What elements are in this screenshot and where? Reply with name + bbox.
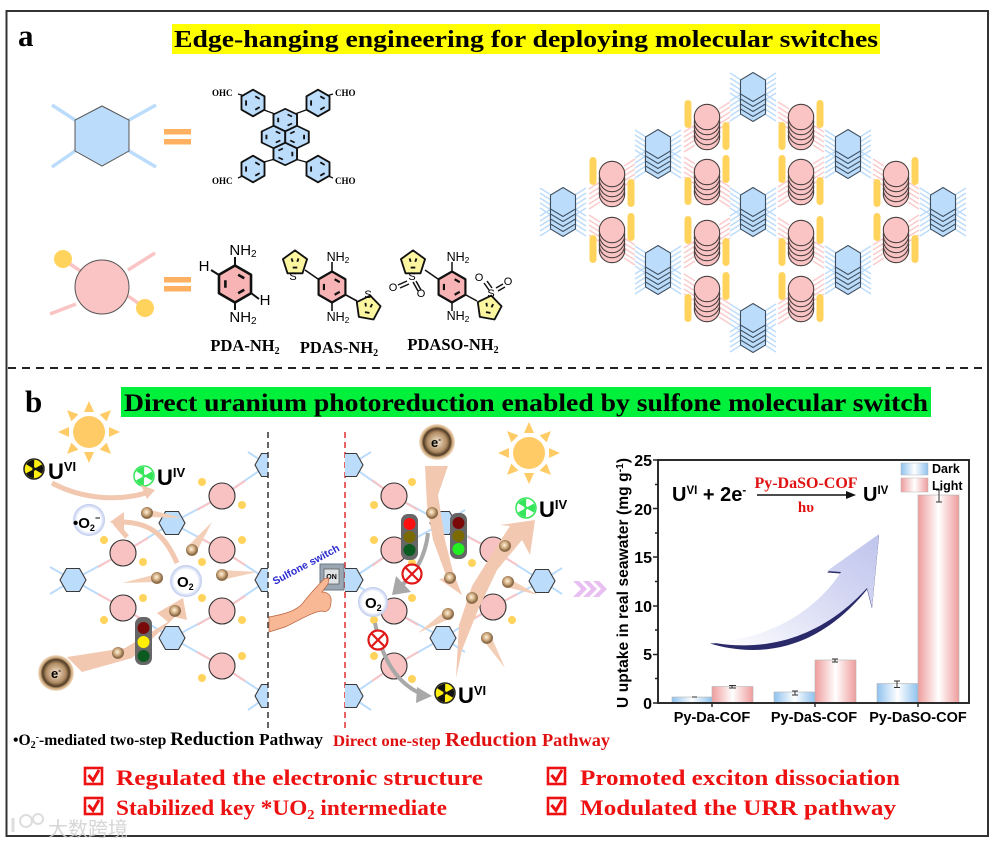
- icon: sun right: [498, 422, 560, 484]
- label PDAS-NH2: 2: [373, 348, 378, 359]
- y axis title: ): [615, 458, 632, 463]
- molecule: pyrene tetra-aldehyde: CHO: [335, 88, 356, 98]
- blocked marker 2: [368, 630, 388, 650]
- x labels: Py-Da-COF: [674, 710, 750, 726]
- equation: U: [863, 484, 877, 506]
- molecule: PDAS-NH2: 2: [345, 315, 350, 325]
- y axis labels: 10: [634, 599, 652, 616]
- molecule: pyrene tetra-aldehyde: OHC: [212, 176, 233, 186]
- molecule: pyrene tetra-aldehyde: CHO: [335, 176, 356, 186]
- divider red: [344, 432, 346, 730]
- COF network right: [337, 452, 562, 710]
- molecule: pyrene tetra-aldehyde: OHC: [212, 88, 233, 98]
- molecule: PDAS-NH2: S: [289, 271, 297, 283]
- bar chart: [615, 453, 969, 726]
- sulfone switch with hand: ON: [326, 574, 337, 581]
- O2 bubble: [170, 565, 202, 597]
- comet electrons: [122, 507, 257, 584]
- molecule: PDAS-NH2: NH: [327, 250, 345, 264]
- molecule: PDASO-NH2: S: [487, 288, 495, 300]
- electron flow arrow down: [419, 424, 462, 595]
- y axis labels: 15: [634, 550, 652, 567]
- U(IV) label right: IV: [555, 497, 568, 512]
- molecule: PDA-NH2: NH: [229, 242, 251, 259]
- y axis labels: 0: [643, 696, 652, 713]
- electron flow arrow down: -: [438, 435, 441, 444]
- molecule: PDASO-NH2: [389, 250, 513, 324]
- molecule: PDAS-NH2: S: [364, 289, 372, 301]
- item: UO2 intermediate: 2: [307, 808, 315, 823]
- molecule: PDA-NH2: [199, 242, 270, 327]
- equals sign 2: [164, 277, 191, 292]
- electron flow arrow: e: [51, 666, 58, 681]
- panel: b: [13, 384, 969, 842]
- legend: Dark: [932, 462, 960, 476]
- U(VI) label: U: [48, 459, 64, 484]
- label PDA-NH2: 2: [275, 346, 280, 357]
- equation: -: [742, 485, 746, 497]
- molecule: PDASO-NH2: O: [417, 288, 426, 300]
- label PDASO-NH2: PDASO-NH: [407, 335, 494, 354]
- big trend arrow: [710, 534, 879, 650]
- caption: two-step pathway: -mediated two-step: [39, 732, 170, 749]
- O2 bubble right: 2: [377, 603, 382, 613]
- molecule: PDASO-NH2: 2: [465, 255, 470, 265]
- x labels: [674, 710, 967, 726]
- watermark: [13, 813, 128, 842]
- heading b: Direct uranium photoreduction enabled by sulfone molecular switch: [124, 390, 928, 417]
- caption: two-step pathway: 2: [31, 740, 36, 751]
- icon: pink circle node: [50, 250, 155, 317]
- molecule: PDAS-NH2: 2: [345, 255, 350, 265]
- equation: [672, 475, 889, 516]
- molecule: PDA-NH2: NH: [229, 309, 251, 326]
- molecule: PDAS-NH2: [283, 250, 382, 325]
- equation: U: [672, 484, 686, 506]
- U(VI) label right: [435, 683, 486, 708]
- item: electronic structure: Regulated the electronic structure: [116, 765, 483, 790]
- superoxide bubble: −: [95, 513, 100, 523]
- label PDA-NH2: PDA-NH: [210, 336, 275, 355]
- conclusions checklist: [85, 765, 901, 823]
- caption: two-step pathway: -: [36, 732, 39, 743]
- big upward electron arrow: [456, 520, 535, 678]
- divider black: [267, 432, 269, 730]
- equation: VI: [686, 485, 697, 497]
- O2 bubble: O: [177, 574, 189, 591]
- O2 bubble right: [358, 587, 388, 617]
- heading a: Edge-hanging engineering for deploying molecular switches: [174, 27, 878, 53]
- item: UO2 intermediate: intermediate: [315, 795, 447, 820]
- equation: hυ: [798, 500, 814, 516]
- gray arrow from O2 to UVI: [375, 623, 432, 703]
- y axis labels: 20: [634, 502, 652, 519]
- chevrons: [573, 581, 607, 597]
- U(IV) label right: [516, 497, 568, 522]
- electron flow arrow: -: [58, 666, 61, 675]
- molecule: PDASO-NH2: S: [408, 271, 416, 283]
- U(IV) label: [134, 465, 186, 490]
- blocked marker 1: [402, 564, 422, 584]
- item: exciton dissociation: Promoted exciton dissociation: [580, 765, 901, 790]
- pathway: two-step (left network): [24, 401, 281, 710]
- equation: Py-DaSO-COF: [754, 475, 858, 492]
- y axis labels: 5: [643, 647, 652, 664]
- label PDAS-NH2: PDAS-NH: [300, 338, 373, 357]
- molecule: PDASO-NH2: O: [504, 276, 513, 288]
- superoxide bubble: •O: [73, 515, 90, 532]
- COF lattice diagram: [540, 72, 966, 352]
- legend: [901, 462, 963, 493]
- molecule: PDA-NH2: 2: [251, 249, 257, 260]
- superoxide bubble: [73, 504, 105, 536]
- molecule: PDA-NH2: H: [199, 258, 209, 275]
- COF network left: [50, 452, 281, 710]
- icon: sun: [58, 401, 120, 463]
- molecule: PDASO-NH2: O: [475, 272, 484, 284]
- y axis labels: 25: [634, 453, 652, 470]
- icon: traffic light yellow: [135, 617, 152, 665]
- equation: + 2e: [697, 484, 742, 506]
- molecule: PDASO-NH2: 2: [465, 314, 470, 324]
- item: UO2 intermediate: [85, 795, 447, 823]
- equals sign 1: [164, 129, 191, 144]
- panel: a: [18, 18, 966, 359]
- molecule: PDAS-NH2: NH: [327, 310, 345, 324]
- icon: traffic light red: [401, 514, 418, 560]
- bars: [672, 495, 959, 703]
- gray blocked arrow to O2: [392, 533, 428, 595]
- error bars: [692, 490, 942, 697]
- item: URR pathway: Modulated the URR pathway: [580, 795, 897, 820]
- legend: Light: [932, 479, 963, 493]
- y axis title: -1: [615, 463, 626, 472]
- y axis labels: [634, 453, 652, 713]
- y axis title: U uptake in real seawater (mg g: [615, 472, 632, 708]
- watermark: 大数跨境: [48, 813, 128, 842]
- equation: IV: [877, 485, 889, 497]
- x labels: Py-DaSO-COF: [869, 710, 967, 726]
- panel label b: b: [25, 384, 42, 419]
- sulfone switch with hand: Sulfone switch: [271, 542, 342, 588]
- axis frame: [658, 460, 969, 703]
- comet electrons right: [418, 576, 538, 668]
- O2 bubble right: O: [365, 595, 377, 612]
- sulfone switch with hand: [269, 542, 344, 632]
- label PDASO-NH2: 2: [494, 345, 499, 356]
- icon: traffic light green: [450, 513, 467, 559]
- U(IV) label right: U: [539, 497, 555, 522]
- molecule: PDA-NH2: 2: [251, 316, 257, 327]
- electron flow arrow down: e: [431, 435, 438, 450]
- caption: one-step pathway: Direct one-step Reduction Pathway: [333, 729, 610, 751]
- caption: two-step pathway: •O: [13, 732, 30, 749]
- U(IV) label: IV: [173, 465, 186, 480]
- superoxide bubble: 2: [90, 523, 95, 533]
- O2 bubble: 2: [189, 582, 194, 592]
- molecule: PDASO-NH2: NH: [447, 309, 465, 323]
- U(VI) label right: VI: [474, 683, 486, 698]
- U(VI) label right: U: [458, 683, 474, 708]
- molecule: PDA-NH2: H: [260, 292, 270, 309]
- molecule: PDASO-NH2: O: [389, 282, 398, 294]
- caption: two-step pathway: Reduction Pathway: [170, 729, 322, 750]
- molecule: pyrene tetra-aldehyde: [212, 88, 356, 186]
- arrow: O2 to superoxide: [110, 512, 177, 563]
- U(IV) label: U: [157, 465, 173, 490]
- electron flow arrow: [38, 598, 187, 691]
- x labels: Py-DaS-COF: [771, 710, 857, 726]
- pathway: one-step (right network): [337, 422, 607, 710]
- U(VI) label: VI: [64, 459, 76, 474]
- panel label a: a: [18, 18, 34, 53]
- arrow: UVI to UIV: [52, 483, 155, 499]
- icon: blue hexagon node: [52, 105, 156, 167]
- U(VI) label: [24, 459, 76, 484]
- molecule: PDASO-NH2: NH: [447, 250, 465, 264]
- item: UO2 intermediate: Stabilized key *UO: [116, 795, 301, 820]
